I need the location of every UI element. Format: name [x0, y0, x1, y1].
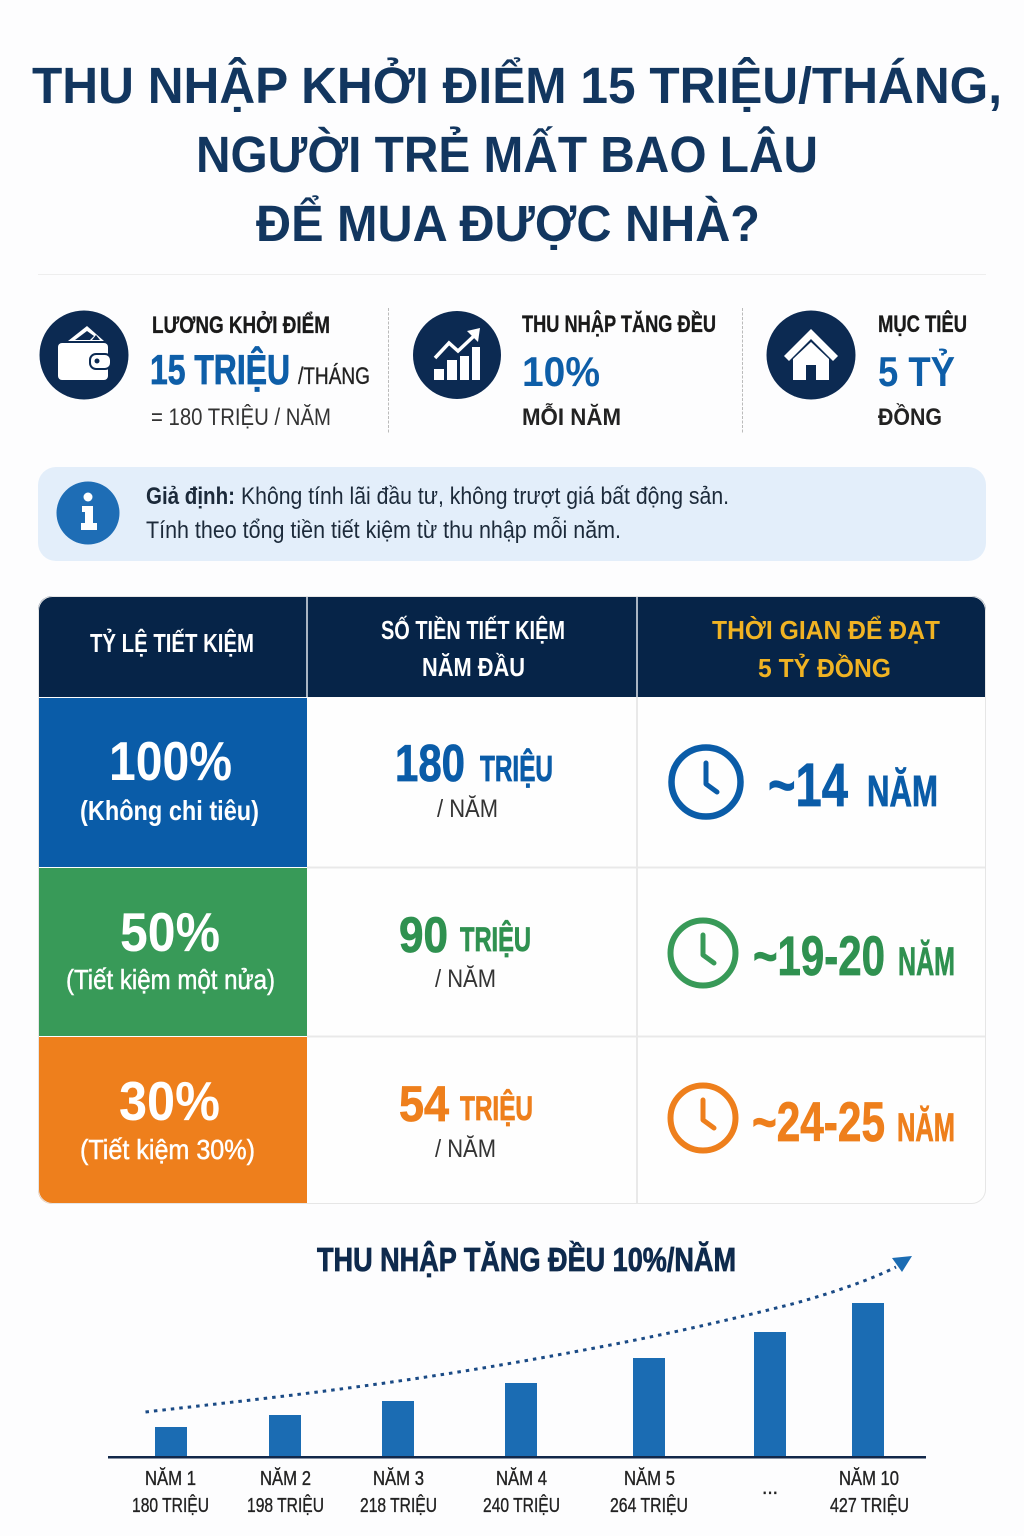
axis labels: 240 TRIỆU [483, 1494, 560, 1517]
icon: house [766, 310, 856, 400]
row: 50 percent: 50% [120, 901, 220, 963]
row: 30 percent: TRIỆU [460, 1090, 533, 1128]
icon: wallet [40, 310, 128, 400]
value: 5 billion: 5 TỶ [878, 347, 955, 395]
axis labels: NĂM 2 [260, 1467, 311, 1490]
row: 50 percent: 90 [399, 907, 448, 963]
icon: clock blue [672, 748, 740, 816]
axis labels: NĂM 1 [145, 1467, 196, 1490]
row: 100 percent: (Không chi tiêu) [80, 795, 259, 826]
note: dong: ĐỒNG [878, 403, 942, 431]
row: 30 percent [80, 1070, 955, 1165]
row: 50 percent: TRIỆU [460, 921, 531, 959]
row: 30 percent: NĂM [897, 1105, 955, 1150]
callout: assumptions [38, 467, 986, 561]
axis labels: NĂM 3 [373, 1467, 424, 1490]
axis labels: NĂM 5 [624, 1467, 675, 1490]
axis labels: NĂM 4 [496, 1467, 547, 1490]
row: 30 percent: (Tiết kiệm 30%) [80, 1134, 255, 1165]
unit: per month: /THÁNG [298, 363, 370, 390]
icon: rising chart [413, 311, 501, 399]
row: 100 percent [80, 730, 938, 826]
chart heading: THU NHẬP TĂNG ĐỀU 10%/NĂM [317, 1241, 736, 1278]
axis labels: 218 TRIỆU [360, 1494, 437, 1517]
bars [155, 1303, 884, 1457]
table header [90, 615, 940, 683]
table header: THỜI GIAN ĐỂ ĐẠT [712, 615, 940, 645]
title: NGƯỜI TRẺ MẤT BAO LÂU [196, 125, 818, 183]
row: 50 percent: / NĂM [435, 964, 496, 993]
row: 30 percent: / NĂM [435, 1134, 496, 1163]
icon: clock orange [670, 1086, 736, 1150]
panel: target [766, 310, 967, 431]
axis labels: 180 TRIỆU [132, 1494, 209, 1517]
table header: TỶ LỆ TIẾT KIỆM [90, 628, 254, 658]
row: 50 percent [66, 901, 955, 995]
row: 50 percent: (Tiết kiệm một nửa) [66, 964, 275, 995]
row: 100 percent: / NĂM [437, 794, 498, 823]
row: 30 percent: 54 [399, 1076, 449, 1132]
row: 30 percent: ~24-25 [752, 1090, 885, 1153]
row: 100 percent: 180 [395, 735, 465, 793]
axis labels: 264 TRIỆU [610, 1494, 688, 1517]
note: each year: MỖI NĂM [522, 402, 621, 431]
assumption text: Giả định: [146, 483, 235, 510]
axis labels [132, 1467, 909, 1517]
row: 50 percent: NĂM [898, 939, 955, 984]
label: starting salary: LƯƠNG KHỞI ĐIỂM [152, 310, 330, 339]
axis labels: 427 TRIỆU [830, 1494, 909, 1517]
table header: NĂM ĐẦU [422, 652, 525, 682]
axis labels: ... [762, 1477, 778, 1499]
arrow: growth trend [146, 1256, 912, 1412]
icon: clock green [670, 920, 736, 986]
row: 100 percent: NĂM [867, 766, 938, 816]
value: 15 million: 15 TRIỆU [150, 345, 290, 393]
table header: SỐ TIỀN TIẾT KIỆM [381, 615, 565, 645]
assumption text: Không tính lãi đầu tư, không trượt giá bất động sản. [241, 483, 729, 510]
assumption text [146, 483, 729, 544]
panel: starting salary [40, 310, 370, 431]
bar chart: income growth 10 percent per year [108, 1241, 926, 1517]
table header: 5 TỶ ĐỒNG [758, 653, 891, 683]
title: ĐỂ MUA ĐƯỢC NHÀ? [256, 194, 760, 252]
label: income growth: THU NHẬP TĂNG ĐỀU [522, 310, 716, 338]
icon: info [56, 482, 120, 544]
axis labels: NĂM 10 [839, 1467, 899, 1490]
note: 180 million per year: = 180 TRIỆU / NĂM [151, 404, 331, 431]
table: savings scenarios [38, 596, 986, 1205]
axis labels: 198 TRIỆU [247, 1494, 324, 1517]
title [32, 56, 1002, 252]
row: 100 percent: TRIỆU [480, 747, 553, 789]
row: 30 percent: 30% [119, 1070, 220, 1132]
row: 100 percent: 100% [109, 730, 232, 792]
row: 50 percent: ~19-20 [753, 924, 885, 987]
panel: income growth [413, 310, 716, 431]
value: 10 percent: 10% [522, 348, 600, 395]
row: 100 percent: ~14 [768, 751, 848, 819]
assumption text: Tính theo tổng tiền tiết kiệm từ thu nhập mỗi năm. [146, 517, 621, 544]
label: target: MỤC TIÊU [878, 310, 967, 338]
title: THU NHẬP KHỞI ĐIỂM 15 TRIỆU/THÁNG, [32, 56, 1002, 114]
